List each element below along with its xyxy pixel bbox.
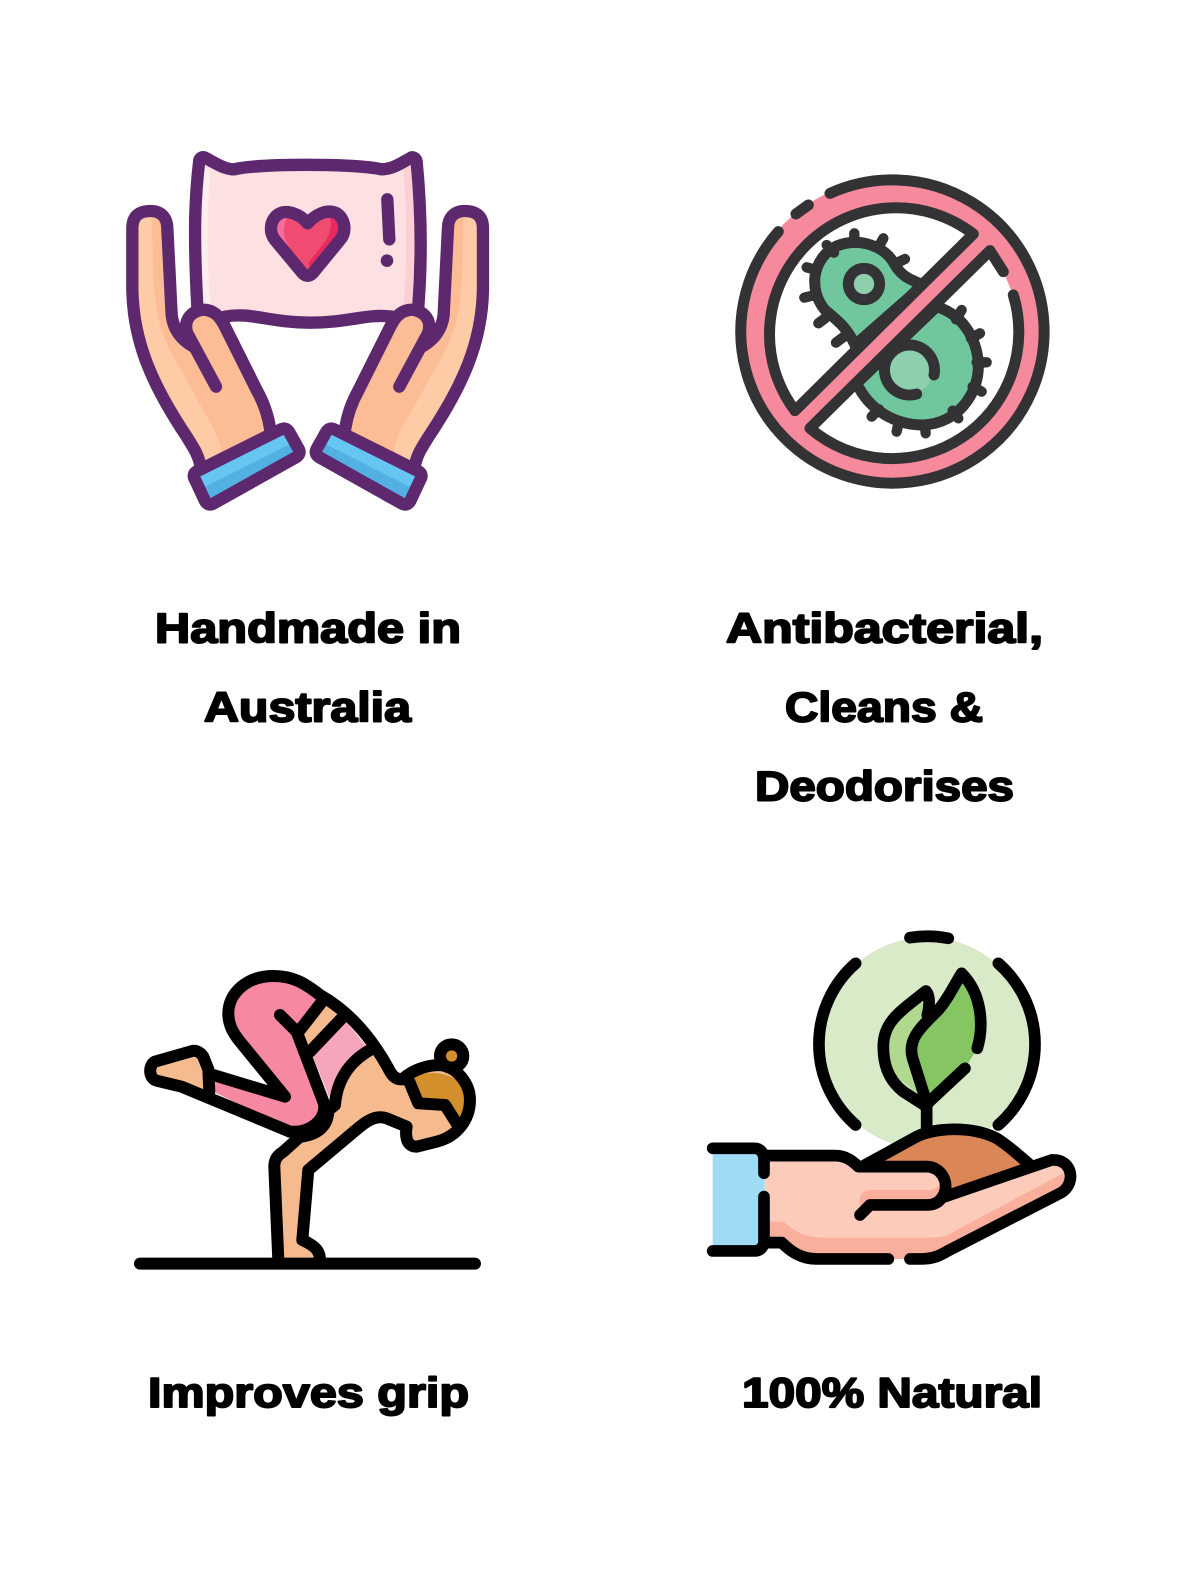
- outlines: [150, 976, 470, 1260]
- exclamation mark: [381, 199, 393, 267]
- label: antibacterial, cleans and deodorises: Deodorises: [755, 762, 1014, 810]
- prohibition disc: [740, 179, 1043, 482]
- seedling: [883, 973, 981, 1130]
- clothing: [213, 976, 367, 1130]
- hair: [410, 1073, 466, 1120]
- icon: hand holding seedling: [713, 936, 1072, 1259]
- left hand: [132, 211, 302, 505]
- icon: yoga crow pose: [140, 976, 475, 1264]
- body: [274, 1050, 470, 1260]
- icon: crossed-out bacteria: [740, 179, 1044, 483]
- foot: [150, 1050, 210, 1097]
- bacteria: [804, 233, 987, 433]
- soil: [865, 1129, 1028, 1193]
- right hand: [314, 211, 483, 505]
- label: antibacterial, cleans and deodorises: [726, 604, 1043, 810]
- label: handmade in Australia: Australia: [204, 684, 412, 730]
- label: 100% natural: 100% Natural: [742, 1369, 1042, 1416]
- label: antibacterial, cleans and deodorises: Antibacterial,: [726, 604, 1043, 652]
- hand: [713, 1148, 1072, 1259]
- halo arcs: [819, 936, 1035, 1125]
- prohibition outlines: [741, 180, 1044, 483]
- heart: [271, 212, 344, 276]
- cuff: [713, 1148, 765, 1251]
- label: antibacterial, cleans and deodorises: Cleans &: [785, 684, 983, 730]
- mat line: [140, 1246, 475, 1282]
- label: handmade in Australia: [155, 604, 461, 730]
- pillow: [195, 157, 421, 323]
- prohibition bar: [795, 234, 990, 428]
- icon: hands holding pillow with heart: [132, 157, 483, 505]
- label: improves grip: Improves grip: [148, 1369, 469, 1416]
- label: handmade in Australia: Handmade in: [155, 604, 461, 652]
- green halo: [821, 937, 1033, 1149]
